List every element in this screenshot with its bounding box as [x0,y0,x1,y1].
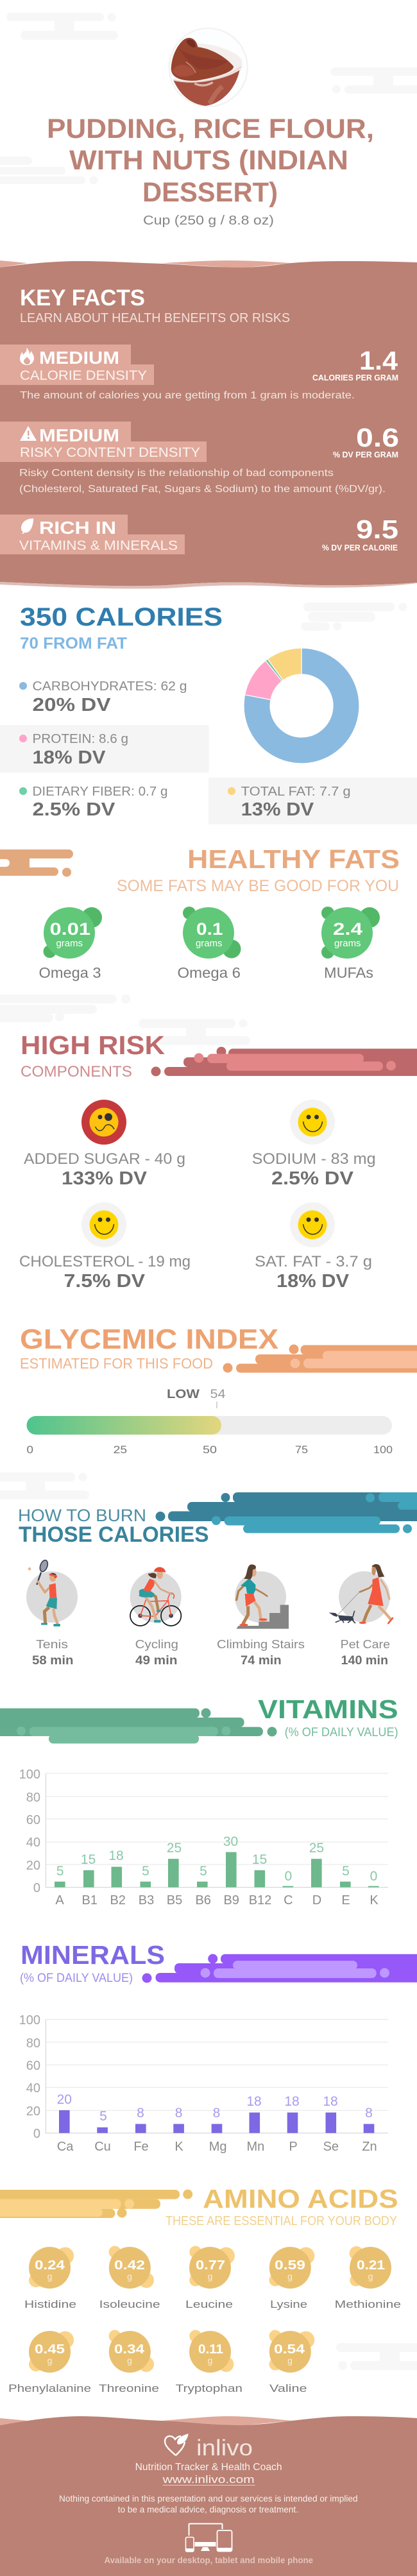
fat: omega 6: Omega 6 [177,964,241,981]
bar chart: minerals: Fe [133,2140,149,2154]
icon: cyclist [130,1567,182,1626]
bar chart: vitamins: 5 [142,1864,149,1879]
fat: omega 3 [38,907,102,981]
decoration: amino acids ribbon [0,2189,192,2218]
amino acid: methionine: 0.21 [357,2258,385,2273]
panel: footer [0,2416,417,2576]
risk: added sugar: 133% DV [62,1168,148,1189]
gauge scale: 100 [373,1444,393,1456]
fat: omega 3: 0.01 [50,919,90,939]
fat: MUFAs: MUFAs [324,964,373,981]
legend: carbohydrates: CARBOHYDRATES: 62 g [32,679,187,694]
icon: flame [20,348,34,365]
bar chart: minerals: Ca [57,2140,74,2154]
amino acid: histidine [24,2247,76,2310]
risk: sodium: SODIUM - 83 mg [252,1150,376,1168]
bar chart: vitamins: 15 [81,1852,96,1867]
availability note: Available on your desktop, tablet and mobile phone [104,2555,313,2565]
disclaimer: Nothing contained in this presentation and our services is intended or implied [59,2493,358,2503]
activity: pet care: 140 min [341,1654,388,1668]
gauge scale: 75 [295,1444,308,1456]
tagline: Nutrition Tracker & Health Coach [135,2462,282,2473]
heading: how to burn those calories: HOW TO BURN [18,1506,146,1525]
bar chart: vitamins: 25 [309,1841,324,1855]
glycemic value label [167,1388,226,1408]
bar chart: minerals: Mg [209,2140,226,2154]
bar chart: vitamins: A [55,1893,64,1907]
bar chart: minerals: Zn [362,2140,377,2154]
heading: healthy fats: HEALTHY FATS [187,844,400,874]
heading: glycemic index: GLYCEMIC INDEX [20,1324,278,1355]
fat: omega 3: Omega 3 [38,964,101,981]
bar chart: vitamins: 25 [167,1841,182,1855]
legend: dietary fiber: 2.5% DV [32,799,115,820]
activity: pet care [329,1564,393,1668]
subheading: SOME FATS MAY BE GOOD FOR YOU [117,877,399,895]
fact: calorie density: 1.4 [359,346,398,375]
fact: risky content density: (Cholesterol, Saturated Fat, Sugars & Sodium) to the amount (%DV/gr). [19,484,386,495]
amino acid: isoleucine [99,2246,160,2310]
bar chart: minerals: 60 [26,2059,40,2073]
fact: calorie density: MEDIUM [39,348,119,368]
disclaimer: to be a medical advice, diagnosis or treatment. [118,2504,298,2514]
bar chart: vitamins: D [312,1893,321,1907]
heading: how to burn those calories: THOSE CALORIES [19,1523,209,1547]
bar chart: minerals: 20 [26,2104,40,2119]
icon: devices [185,2524,232,2552]
risk: added sugar [24,1100,185,1189]
amino acid: histidine: Histidine [24,2298,76,2310]
activity: cycling: Cycling [135,1638,178,1651]
bar chart: vitamins: 5 [56,1864,64,1879]
bar chart: vitamins: K [370,1893,379,1907]
fact: calorie density: CALORIE DENSITY [20,368,147,383]
gauge scale: 0 [27,1444,33,1456]
risk: cholesterol: CHOLESTEROL - 19 mg [19,1253,191,1270]
legend: dietary fiber: DIETARY FIBER: 0.7 g [32,785,168,799]
bar chart: vitamins: 20 [26,1859,40,1873]
bar chart: minerals: P [289,2140,298,2154]
legend: total fat: 13% DV [241,799,314,820]
fat: omega 6 [177,907,241,981]
bar chart: vitamins: 0 [370,1869,377,1884]
decoration: burn ribbon [155,1492,417,1533]
amino acid: lysine: g [287,2271,293,2282]
risk: sodium [252,1100,376,1189]
bar chart: minerals: 100 [19,2013,40,2027]
amino acid: lysine [269,2247,314,2310]
glycemic value label: 54 [210,1388,226,1401]
bar chart: vitamins: 0 [33,1881,40,1895]
amino acid: valine: Valine [269,2382,307,2394]
fact: rich in vitamins and minerals: VITAMINS & MINERALS [19,538,178,553]
risk: saturated fat [255,1202,372,1292]
gauge scale: 25 [114,1444,127,1456]
bar chart: minerals: 8 [365,2106,373,2120]
heading: 350 calories: 350 CALORIES [20,603,223,631]
activity: tennis: Tenis [36,1638,68,1651]
amino acid: tryptophan [176,2330,243,2394]
amino acid: threonine [99,2330,159,2394]
heading: amino acids: AMINO ACIDS [203,2184,398,2213]
risk: saturated fat: SAT. FAT - 3.7 g [255,1253,372,1270]
subheading: (% OF DAILY VALUE) [20,1972,133,1985]
heading: how to burn those calories [18,1506,209,1547]
risk: sodium: 2.5% DV [271,1168,354,1189]
logo: inlivo [165,2434,253,2461]
fat: MUFAs: 2.4 [333,919,362,939]
subheading: components: COMPONENTS [21,1063,132,1080]
legend: total fat [208,778,417,824]
bar chart: vitamins: 30 [223,1834,238,1849]
fact: calorie density: The amount of calories you are getting from 1 gram is moderate. [20,390,355,401]
amino acid: isoleucine: Isoleucine [99,2298,160,2310]
amino acid: histidine: g [47,2271,52,2282]
icon: warning triangle [20,426,37,441]
bar chart: vitamins: E [341,1893,350,1907]
activity: tennis: 58 min [32,1654,73,1668]
legend: protein: PROTEIN: 8.6 g [32,732,128,746]
activity: climbing stairs: 74 min [241,1654,282,1668]
bar chart: minerals: 8 [137,2106,144,2120]
title: PUDDING, RICE FLOUR, [47,114,374,144]
subheading: THESE ARE ESSENTIAL FOR YOUR BODY [166,2214,397,2228]
fact: calorie density [0,345,398,401]
bar chart: vitamins: 15 [252,1852,267,1867]
bar chart: vitamins: 18 [108,1848,124,1863]
amino acid: phenylalanine: Phenylalanine [8,2382,91,2394]
subheading: from fat: 70 FROM FAT [20,635,127,653]
subheading: ESTIMATED FOR THIS FOOD [20,1355,213,1372]
serving size: Cup (250 g / 8.8 oz) [143,214,274,228]
amino acid: tryptophan: 0.11 [198,2342,223,2357]
food photo: pudding bowl [169,28,248,107]
activity: tennis [26,1559,78,1668]
subheading: (% OF DAILY VALUE) [285,1726,398,1739]
bar chart: minerals: 80 [26,2036,40,2051]
glycemic value label: LOW [167,1388,200,1401]
website link: www.inlivo.com [162,2473,255,2486]
activity: cycling: 49 min [135,1654,177,1668]
bar chart: minerals: 20 [57,2092,72,2107]
title [47,114,374,208]
amino acid: leucine: 0.77 [196,2258,225,2273]
amino acid: isoleucine: g [127,2271,132,2282]
bar chart: vitamins: 5 [342,1864,350,1879]
legend: total fat: TOTAL FAT: 7.7 g [241,785,351,799]
bar chart: minerals: 0 [33,2127,40,2141]
glycemic gauge bar [27,1416,392,1435]
subheading: LEARN ABOUT HEALTH BENEFITS OR RISKS [20,311,290,325]
bar chart: minerals: 5 [99,2109,107,2124]
amino acid: valine: 0.54 [274,2342,305,2357]
heading: minerals: MINERALS [21,1940,165,1970]
amino acid: phenylalanine [8,2331,91,2394]
bar chart: minerals: 8 [175,2106,182,2120]
fact: rich in vitamins and minerals [0,515,398,554]
decoration: high risk ribbon [151,1047,417,1077]
bar chart: vitamins: 5 [200,1864,207,1879]
bar chart: minerals: Cu [94,2140,111,2154]
title: DESSERT) [142,177,278,208]
amino acid: threonine: g [127,2355,132,2366]
title: WITH NUTS (INDIAN [69,145,348,176]
bar chart: vitamins: 80 [26,1791,40,1805]
fact: risky content density: Risky Content density is the relationship of bad components [19,468,334,479]
bar chart: vitamins: B1 [81,1893,98,1907]
donut chart: macronutrients [244,648,359,763]
amino acid: tryptophan: g [208,2355,212,2366]
fact: calorie density: CALORIES PER GRAM [312,373,398,382]
amino acid: valine [269,2330,314,2394]
bar chart: minerals: 18 [284,2094,300,2109]
bar chart: vitamins: C [284,1893,293,1907]
amino acid: valine: g [287,2355,293,2366]
risk: cholesterol: 7.5% DV [64,1271,146,1292]
bar chart: minerals: 18 [323,2094,338,2109]
legend: dietary fiber [19,785,168,820]
amino acid: methionine: Methionine [335,2298,401,2310]
bar chart: vitamins: 100 [19,1768,40,1782]
fat: omega 6: 0.1 [196,919,223,939]
amino acid: isoleucine: 0.42 [114,2258,145,2273]
amino acid: phenylalanine: 0.45 [35,2342,65,2357]
amino acid: threonine: Threonine [99,2382,159,2394]
amino acid: histidine: 0.24 [35,2258,65,2273]
bar chart: vitamins: B5 [167,1893,182,1907]
decoration: healthy fats ribbon [0,849,73,876]
fact: rich in vitamins and minerals: RICH IN [39,518,116,538]
icon: stair climber [235,1564,289,1629]
disclaimer [59,2493,358,2514]
bar chart: minerals: 8 [213,2106,220,2120]
heading: high risk: HIGH RISK [21,1030,165,1060]
fact: risky content density: % DV PER GRAM [333,450,398,459]
activity: climbing stairs [217,1564,305,1668]
amino acid: threonine: 0.34 [114,2342,145,2357]
amino acid: lysine: 0.59 [275,2258,305,2273]
activity: cycling [130,1567,182,1668]
legend: protein: 18% DV [32,747,106,768]
icon: leaf [21,518,33,534]
fact: rich in vitamins and minerals: % DV PER CALORIE [322,543,398,552]
bar chart: minerals: K [174,2140,183,2154]
amino acid: leucine: Leucine [185,2298,233,2310]
activity: climbing stairs: Climbing Stairs [217,1638,305,1651]
decoration: glycemic ribbon [223,1345,417,1373]
icon: dog walker [329,1564,393,1624]
fact: risky content density: MEDIUM [39,425,119,445]
fact: risky content density: RISKY CONTENT DENSITY [20,445,200,460]
bar chart: vitamins: B2 [110,1893,126,1907]
heading: key facts: KEY FACTS [20,286,145,311]
bar chart: minerals [19,2013,388,2154]
amino acid: leucine: g [208,2271,212,2282]
bar chart: vitamins: B3 [139,1893,154,1907]
fat: MUFAs: grams [334,938,361,949]
amino acid: phenylalanine: g [47,2355,52,2366]
fat: MUFAs [321,907,380,981]
risk: saturated fat: 18% DV [277,1271,350,1292]
amino acid: methionine: g [368,2271,373,2282]
legend: protein [0,725,209,772]
bar chart: vitamins: B12 [249,1893,271,1907]
risk: cholesterol [19,1202,191,1292]
risk: added sugar: ADDED SUGAR - 40 g [24,1150,185,1168]
fact: risky content density: 0.6 [356,423,399,452]
legend: carbohydrates: 20% DV [32,695,111,715]
bar chart: minerals: 40 [26,2081,40,2095]
gauge scale: 50 [203,1444,217,1456]
bar chart: vitamins: 60 [26,1813,40,1827]
legend: carbohydrates [19,679,187,715]
amino acid: tryptophan: Tryptophan [176,2382,243,2394]
bar chart: minerals: Mn [247,2140,264,2154]
heading: vitamins: VITAMINS [258,1694,398,1724]
amino acid: methionine [335,2246,401,2310]
fact: risky content density [0,422,399,495]
fat: omega 6: grams [196,938,222,949]
panel: key facts [0,260,417,589]
amino acid: leucine [185,2246,235,2310]
activity: pet care: Pet Care [341,1638,390,1651]
fact: rich in vitamins and minerals: 9.5 [356,515,398,544]
bar chart: vitamins: B9 [223,1893,239,1907]
bar chart: vitamins [19,1768,388,1907]
icon: tennis player [26,1559,78,1626]
decoration: minerals ribbon [142,1954,417,1983]
gauge scale [27,1444,393,1456]
fat: omega 3: grams [56,938,83,949]
bar chart: minerals: 18 [246,2094,262,2109]
decoration: vitamins ribbon [0,1708,277,1744]
amino acid: lysine: Lysine [270,2298,307,2310]
bar chart: minerals: Se [323,2140,339,2154]
bar chart: vitamins: 0 [285,1869,292,1884]
bar chart: vitamins: B6 [195,1893,211,1907]
bar chart: vitamins: 40 [26,1836,40,1850]
logo: inlivo: inlivo [196,2435,253,2461]
